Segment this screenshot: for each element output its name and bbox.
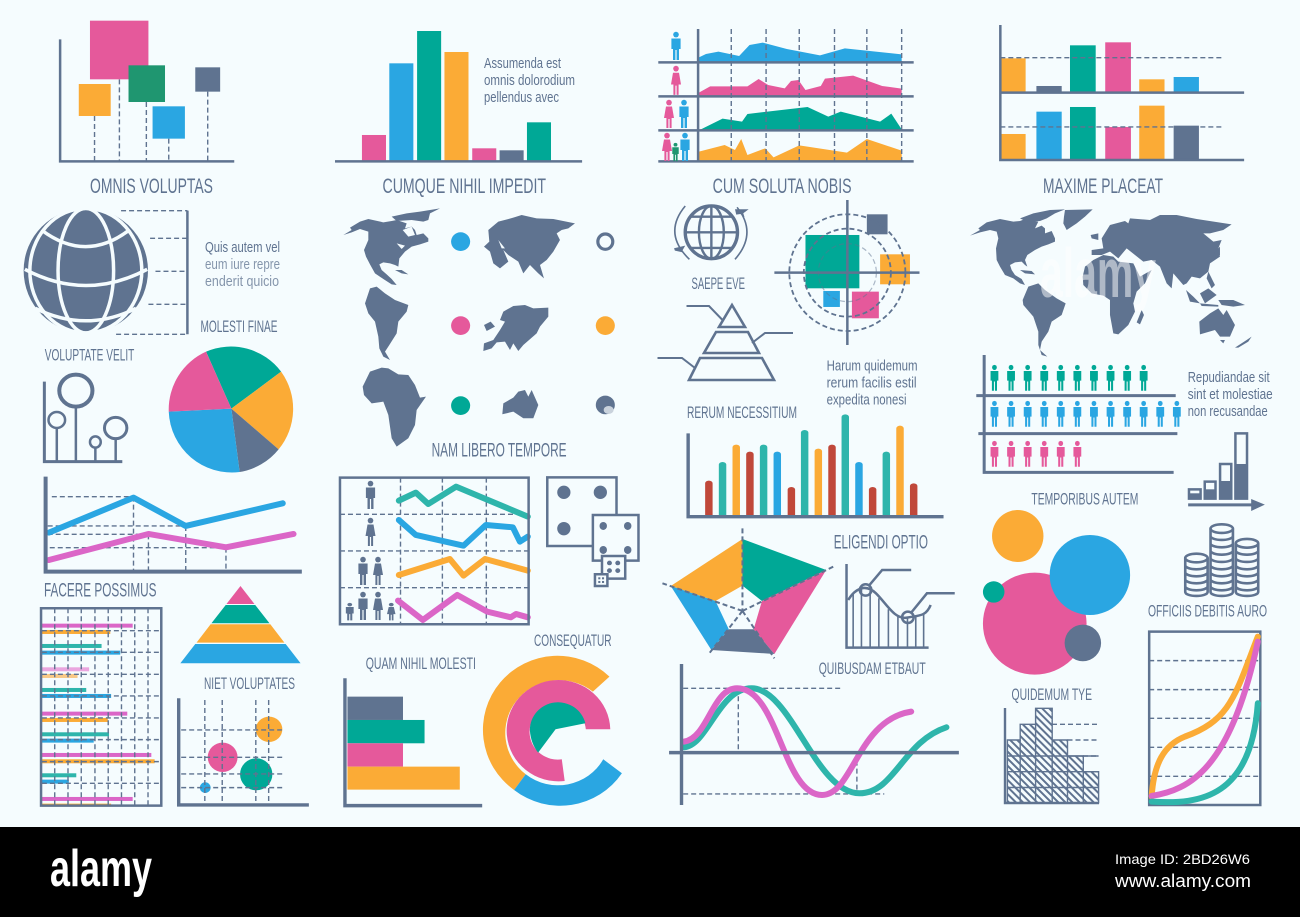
- curve: lilac: [1152, 642, 1258, 796]
- segment: teal: [742, 539, 826, 601]
- line grid: [340, 478, 529, 624]
- icon: globe with orbit: [674, 206, 749, 259]
- heading: QUIBUSDAM ETBAUT: [819, 660, 926, 678]
- thin bar chart: [688, 414, 944, 517]
- curve: teal: [1152, 703, 1258, 802]
- large square: [547, 477, 617, 546]
- arrow: [1188, 499, 1265, 511]
- segment: blue: [671, 586, 729, 650]
- growth bars: [1189, 433, 1247, 499]
- stacked area charts: [658, 29, 914, 161]
- squares chart: [60, 21, 234, 161]
- axes: [976, 355, 1177, 472]
- heading: MAXIME PLACEAT: [1043, 175, 1163, 198]
- heading: CONSEQUATUR: [534, 632, 612, 650]
- panel: mini growth bars with arrow: [1188, 433, 1265, 511]
- image id: Image ID: 2BD26W6: [1115, 851, 1250, 867]
- logo: alamy: [50, 840, 152, 898]
- panel: cum soluta nobis area charts: [658, 29, 914, 198]
- slice: orange: [231, 372, 293, 449]
- text block: pellendus avec: [484, 89, 559, 106]
- heading: NIET VOLUPTATES: [204, 675, 295, 693]
- panel: harum text: expedita nonesi: [827, 392, 907, 409]
- text block: [484, 55, 575, 106]
- website: www.alamy.com: [1114, 871, 1251, 891]
- small square: [602, 556, 625, 579]
- panel: cumque nihil impedit bars: [335, 31, 582, 198]
- bubbles: [983, 510, 1130, 675]
- watermark: alamy: [1040, 234, 1156, 312]
- slice: pink: [169, 352, 231, 412]
- africa: [363, 368, 426, 447]
- heading: RERUM NECESSITIUM: [687, 404, 797, 422]
- panel: maxime world map: [970, 209, 1252, 357]
- heading: SAEPE EVE: [692, 275, 745, 293]
- text block: Repudiandae sit: [1188, 369, 1270, 386]
- panel: voluptate velit lollipops: [44, 347, 134, 462]
- panel: officiis debitis auro coins: [1148, 524, 1267, 621]
- spokes: [662, 528, 835, 658]
- south america: [365, 287, 408, 360]
- text block: eum iure repre: [205, 256, 280, 273]
- slice: slate: [231, 409, 279, 472]
- panel: maxime placeat double bars: [1000, 25, 1244, 198]
- line chart: [46, 477, 302, 572]
- panel: horizontal bars grid: [41, 608, 161, 807]
- text block: sint et molestiae: [1188, 386, 1273, 403]
- area callout chart: [847, 564, 955, 648]
- europe: [483, 305, 548, 351]
- text block: non recusandae: [1188, 403, 1268, 420]
- segment: slate: [711, 629, 774, 654]
- footer bar: [0, 827, 1300, 917]
- medium square: [593, 515, 638, 561]
- north america: [343, 208, 440, 285]
- slice: teal: [206, 347, 281, 409]
- wave chart: [669, 664, 959, 805]
- panel: harum text: [827, 358, 918, 409]
- curve: orange: [1152, 637, 1258, 797]
- grid frame: [1149, 632, 1260, 805]
- heading: CUM SOLUTA NOBIS: [713, 175, 852, 198]
- slice: blue: [169, 409, 240, 472]
- panel: eligendi optio area callouts: [834, 533, 955, 648]
- panel: harum text: Harum quidemum: [827, 358, 918, 375]
- callout lines: [116, 211, 187, 334]
- icon: coin stacks: [1185, 524, 1258, 596]
- grid frame: [41, 608, 161, 806]
- panel: rerum necessitium thin bars: [687, 404, 944, 517]
- world map: [970, 209, 1252, 357]
- heading: QUIDEMUM TYE: [1012, 686, 1092, 704]
- australia: [502, 390, 538, 418]
- text block: omnis dolorodium: [484, 72, 575, 89]
- heading: VOLUPTATE VELIT: [45, 347, 134, 365]
- legend dots: [451, 232, 615, 415]
- layer: pink: [226, 586, 254, 604]
- panel: pie chart: [169, 347, 293, 472]
- double bar chart: [1000, 25, 1244, 160]
- heading: QUAM NIHIL MOLESTI: [366, 655, 476, 673]
- panel: nested squares with dots: [547, 477, 638, 586]
- panel: radar chart: [662, 528, 835, 658]
- heading: CUMQUE NIHIL IMPEDIT: [382, 175, 546, 198]
- callouts: [658, 306, 793, 368]
- heading: OMNIS VOLUPTAS: [90, 175, 213, 198]
- hatched stepped bars: [1005, 708, 1099, 803]
- panel: target squares chart: [774, 200, 919, 345]
- panel: globe with callouts: [24, 208, 280, 336]
- heading: FACERE POSSIMUS: [44, 581, 156, 602]
- horizontal bar chart: [345, 678, 482, 806]
- panel: niet voluptates bubble plot: [179, 675, 309, 805]
- row: teal people: [991, 365, 1148, 391]
- text block: Assumenda est: [484, 55, 562, 72]
- panel: harum text: rerum facilis estil: [827, 375, 917, 392]
- squares: [805, 235, 859, 288]
- panel: quam nihil molesti horizontal bars: [345, 655, 482, 806]
- text block: Quis autem vel: [205, 239, 280, 256]
- text block: [205, 239, 280, 290]
- layer: orange: [197, 624, 284, 643]
- radial chart: [483, 656, 622, 806]
- layer: blue: [180, 644, 301, 663]
- panel: coloured pyramid: [180, 586, 301, 663]
- panel: people rows: [976, 355, 1273, 472]
- heading: MOLESTI FINAE: [200, 318, 278, 336]
- tiny square: [595, 574, 607, 586]
- panel: quibusdam etbaut wave chart: [669, 660, 959, 805]
- target rings: [774, 200, 919, 345]
- text block: enderit quicio: [205, 273, 279, 290]
- panel: omnis voluptas floating squares: [60, 21, 234, 198]
- paired bars: [42, 624, 155, 807]
- panel: facere possimus line chart: [44, 477, 302, 602]
- lollipop chart: [44, 375, 127, 462]
- panel: people line chart: [340, 478, 529, 624]
- text block: [1188, 369, 1273, 420]
- row: pink people: [991, 441, 1081, 467]
- panel: three curves chart: [1149, 632, 1260, 805]
- panel: quidemum tye hatched bars: [1005, 686, 1099, 803]
- people icons: [346, 481, 396, 620]
- heading: ELIGENDI OPTIO: [834, 533, 928, 554]
- heading: TEMPORIBUS AUTEM: [1031, 491, 1138, 509]
- icon: globe: [24, 208, 148, 333]
- bubble plot: [179, 698, 309, 805]
- panel: saepe eve globe icon: [674, 206, 749, 293]
- segment: pink: [754, 570, 826, 654]
- people icons: [662, 32, 690, 161]
- eurasia: [484, 215, 575, 278]
- pyramid layers: [689, 305, 774, 380]
- panel: temporibus autem bubbles: [983, 491, 1138, 675]
- heading: NAM LIBERO TEMPORE: [432, 441, 567, 462]
- segment: orange: [671, 539, 742, 601]
- layer: teal: [211, 605, 269, 623]
- panel: continents map with dots: [343, 208, 615, 462]
- panel: consequatur radial rings: [483, 632, 622, 806]
- panel: outlined pyramid: [658, 305, 793, 380]
- row: blue people: [991, 401, 1181, 427]
- bar chart: [335, 31, 582, 161]
